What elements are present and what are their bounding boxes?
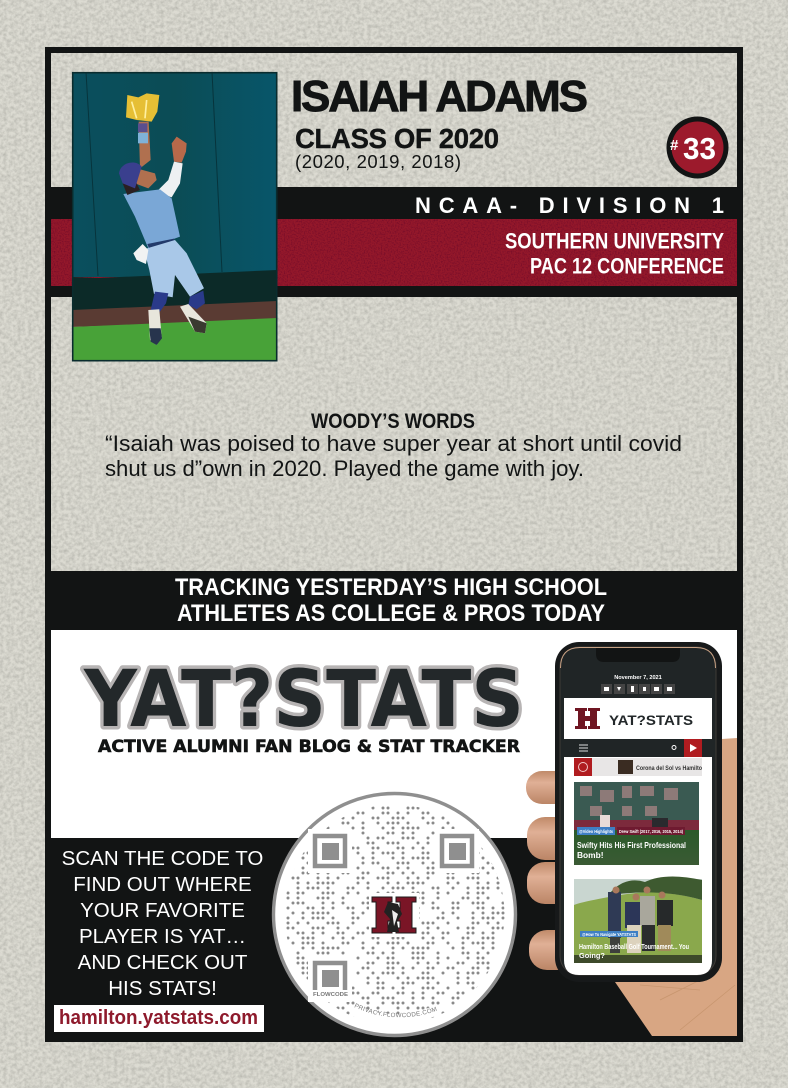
scan instructions: FIND OUT WHERE bbox=[73, 873, 252, 896]
quote block: WOODY’S WORDS bbox=[311, 410, 475, 433]
scan instructions: YOUR FAVORITE bbox=[80, 899, 245, 922]
quote block: “Isaiah was poised to have super year at short until covid bbox=[105, 431, 682, 456]
privacy arc text: PRIVACY.FLOWCODE.COM bbox=[354, 1003, 437, 1018]
phone notch bbox=[596, 648, 680, 662]
finder top right bbox=[435, 829, 479, 873]
scan instructions: SCAN THE CODE TO bbox=[62, 847, 263, 870]
header bands bbox=[51, 187, 737, 297]
tagline: ACTIVE ALUMNI FAN BLOG & STAT TRACKER bbox=[98, 737, 520, 756]
phone article one bbox=[574, 782, 699, 865]
jersey number badge: # bbox=[670, 137, 679, 154]
jersey number badge bbox=[666, 116, 728, 178]
phone article two bbox=[574, 876, 702, 963]
player name: ISAIAH ADAMS bbox=[291, 72, 588, 121]
phone date: November 7, 2021 bbox=[614, 675, 662, 681]
seasons: (2020, 2019, 2018) bbox=[295, 151, 461, 172]
scan instructions: AND CHECK OUT bbox=[78, 951, 248, 974]
phone ticker bbox=[574, 758, 702, 776]
phone article two: Going? bbox=[579, 951, 605, 960]
tracking banner: TRACKING YESTERDAY’S HIGH SCHOOL bbox=[175, 574, 607, 601]
school name: SOUTHERN UNIVERSITY bbox=[505, 228, 724, 254]
phone article one: Bomb! bbox=[577, 850, 604, 860]
phone white page bbox=[564, 698, 712, 975]
conference: PAC 12 CONFERENCE bbox=[530, 254, 724, 278]
QR dots bbox=[286, 806, 504, 1018]
scan instructions: HIS STATS! bbox=[108, 977, 217, 1000]
scan instructions bbox=[62, 847, 263, 1000]
YAT?STATS logo: YAT?STATS bbox=[83, 655, 524, 745]
finder top left bbox=[308, 829, 352, 873]
class year: CLASS OF 2020 bbox=[295, 123, 499, 154]
phone article one: Swifty Hits His First Professional bbox=[577, 840, 686, 850]
hand holding phone bbox=[526, 738, 737, 1036]
scan instructions: PLAYER IS YAT… bbox=[79, 925, 246, 948]
quote block bbox=[105, 410, 682, 481]
player photo bbox=[72, 72, 277, 361]
tracking banner bbox=[51, 571, 737, 630]
jersey number badge: 33 bbox=[683, 131, 716, 166]
quote block: shut us d”own in 2020. Played the game with joy. bbox=[105, 456, 584, 481]
phone article two: Hamilton Baseball Golf Tournament... You bbox=[579, 942, 689, 951]
phone article one: @Video Highlights bbox=[579, 829, 613, 834]
promo panel background bbox=[51, 630, 737, 1036]
card frame bbox=[48, 50, 740, 1039]
phone nav bar bbox=[564, 739, 712, 757]
QR code bbox=[272, 792, 518, 1038]
finder bottom left with flowcode label bbox=[308, 956, 352, 1002]
phone article two: @How To Navigate YATSTATS bbox=[582, 932, 636, 937]
phone social icons bbox=[601, 684, 675, 694]
phone site logo bbox=[575, 708, 693, 729]
smartphone bbox=[555, 642, 722, 982]
phone site logo: YAT?STATS bbox=[609, 712, 693, 728]
outfielder figure bbox=[119, 93, 207, 345]
division label: NCAA- DIVISION 1 bbox=[415, 193, 724, 218]
center H logo bbox=[369, 893, 419, 937]
tracking banner: ATHLETES AS COLLEGE & PROS TODAY bbox=[177, 600, 605, 627]
website url: hamilton.yatstats.com bbox=[59, 1007, 258, 1029]
phone ticker: Corona del Sol vs Hamilto bbox=[636, 765, 702, 772]
finder bottom left with flowcode label: FLOWCODE bbox=[313, 992, 348, 998]
phone article one: Drew Swift (2017, 2016, 2015, 2014) bbox=[619, 829, 684, 834]
